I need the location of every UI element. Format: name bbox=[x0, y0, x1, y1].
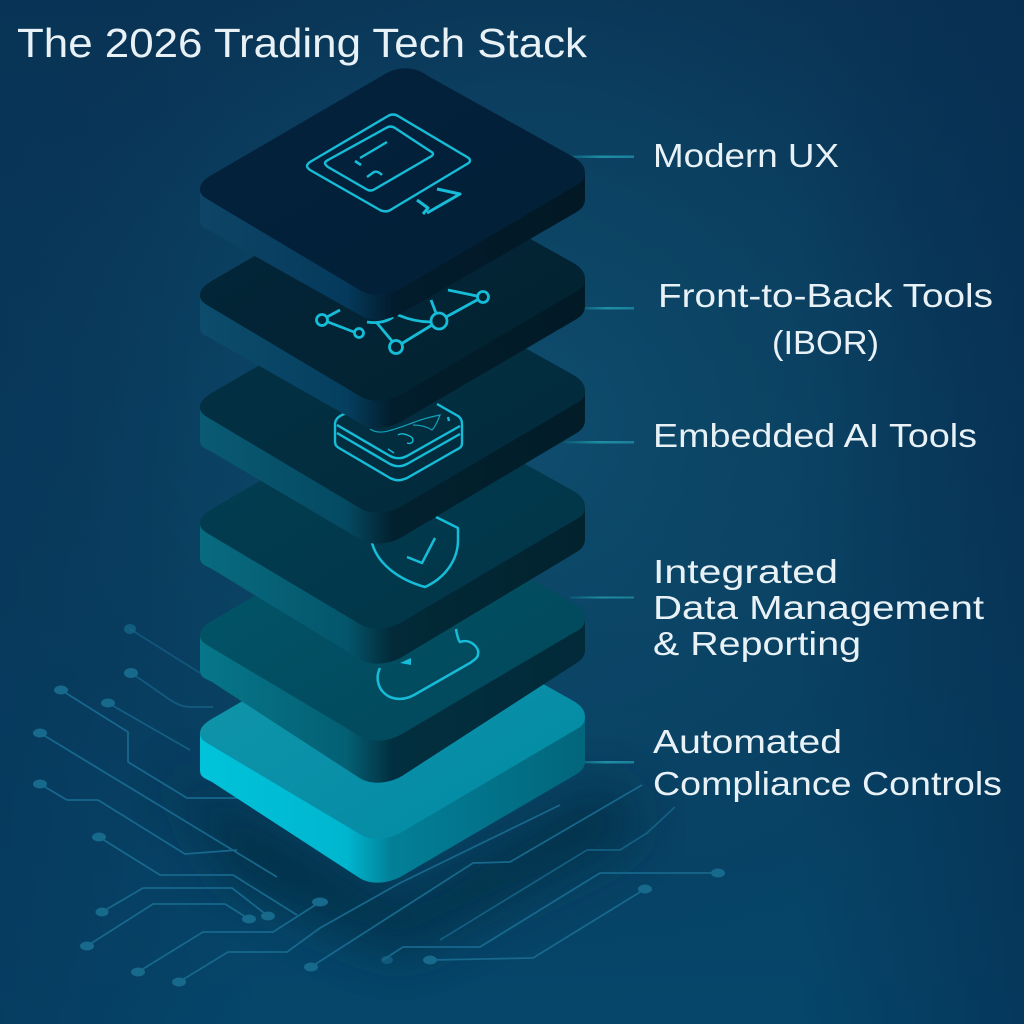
icon: shield with check bbox=[372, 517, 458, 587]
layer 4: shield icon bbox=[200, 402, 585, 664]
layer 3: embedded AI bbox=[200, 286, 585, 544]
label: Embedded AI Tools: Embedded AI Tools bbox=[653, 417, 977, 454]
layer 1: modern UX bbox=[200, 68, 585, 320]
icon: monitor bbox=[307, 114, 470, 214]
shadow under stack bbox=[170, 770, 640, 950]
circuit nodes bbox=[33, 624, 725, 986]
layer 6: automated compliance bbox=[200, 612, 585, 883]
connector: Embedded AI Tools bbox=[565, 441, 634, 444]
label: Automated Compliance Controls bbox=[653, 723, 1002, 802]
label: Integrated Data Management & Reporting: Integrated bbox=[653, 553, 838, 590]
connector: Automated Compliance Controls bbox=[578, 761, 634, 764]
label: Automated Compliance Controls: Automated bbox=[653, 723, 842, 760]
layer stack bbox=[200, 68, 585, 883]
label: Front-to-Back Tools (IBOR) bbox=[658, 277, 993, 361]
connector: Front-to-Back Tools bbox=[580, 307, 634, 310]
connector: Integrated Data Management bbox=[570, 596, 634, 598]
label: Integrated Data Management & Reporting: Data Management bbox=[653, 589, 984, 626]
title: The 2026 Trading Tech Stack bbox=[17, 20, 588, 66]
icon: layered chip bbox=[335, 404, 462, 480]
label: Integrated Data Management & Reporting bbox=[653, 553, 984, 662]
label: Modern UX: Modern UX bbox=[653, 137, 839, 174]
label: Front-to-Back Tools (IBOR): (IBOR) bbox=[772, 324, 879, 361]
label: Integrated Data Management & Reporting: & Reporting bbox=[653, 625, 861, 662]
layer 2: front-to-back network bbox=[200, 174, 585, 428]
icon: network nodes bbox=[316, 290, 488, 354]
label: Front-to-Back Tools (IBOR): Front-to-Back Tools bbox=[658, 277, 993, 314]
layer 5: data with cloud icon bbox=[200, 514, 585, 783]
label: Automated Compliance Controls: Compliance Controls bbox=[653, 765, 1002, 802]
icon: cloud bbox=[378, 629, 478, 699]
circuit traces bbox=[40, 629, 718, 982]
connector: Modern UX bbox=[570, 156, 634, 158]
